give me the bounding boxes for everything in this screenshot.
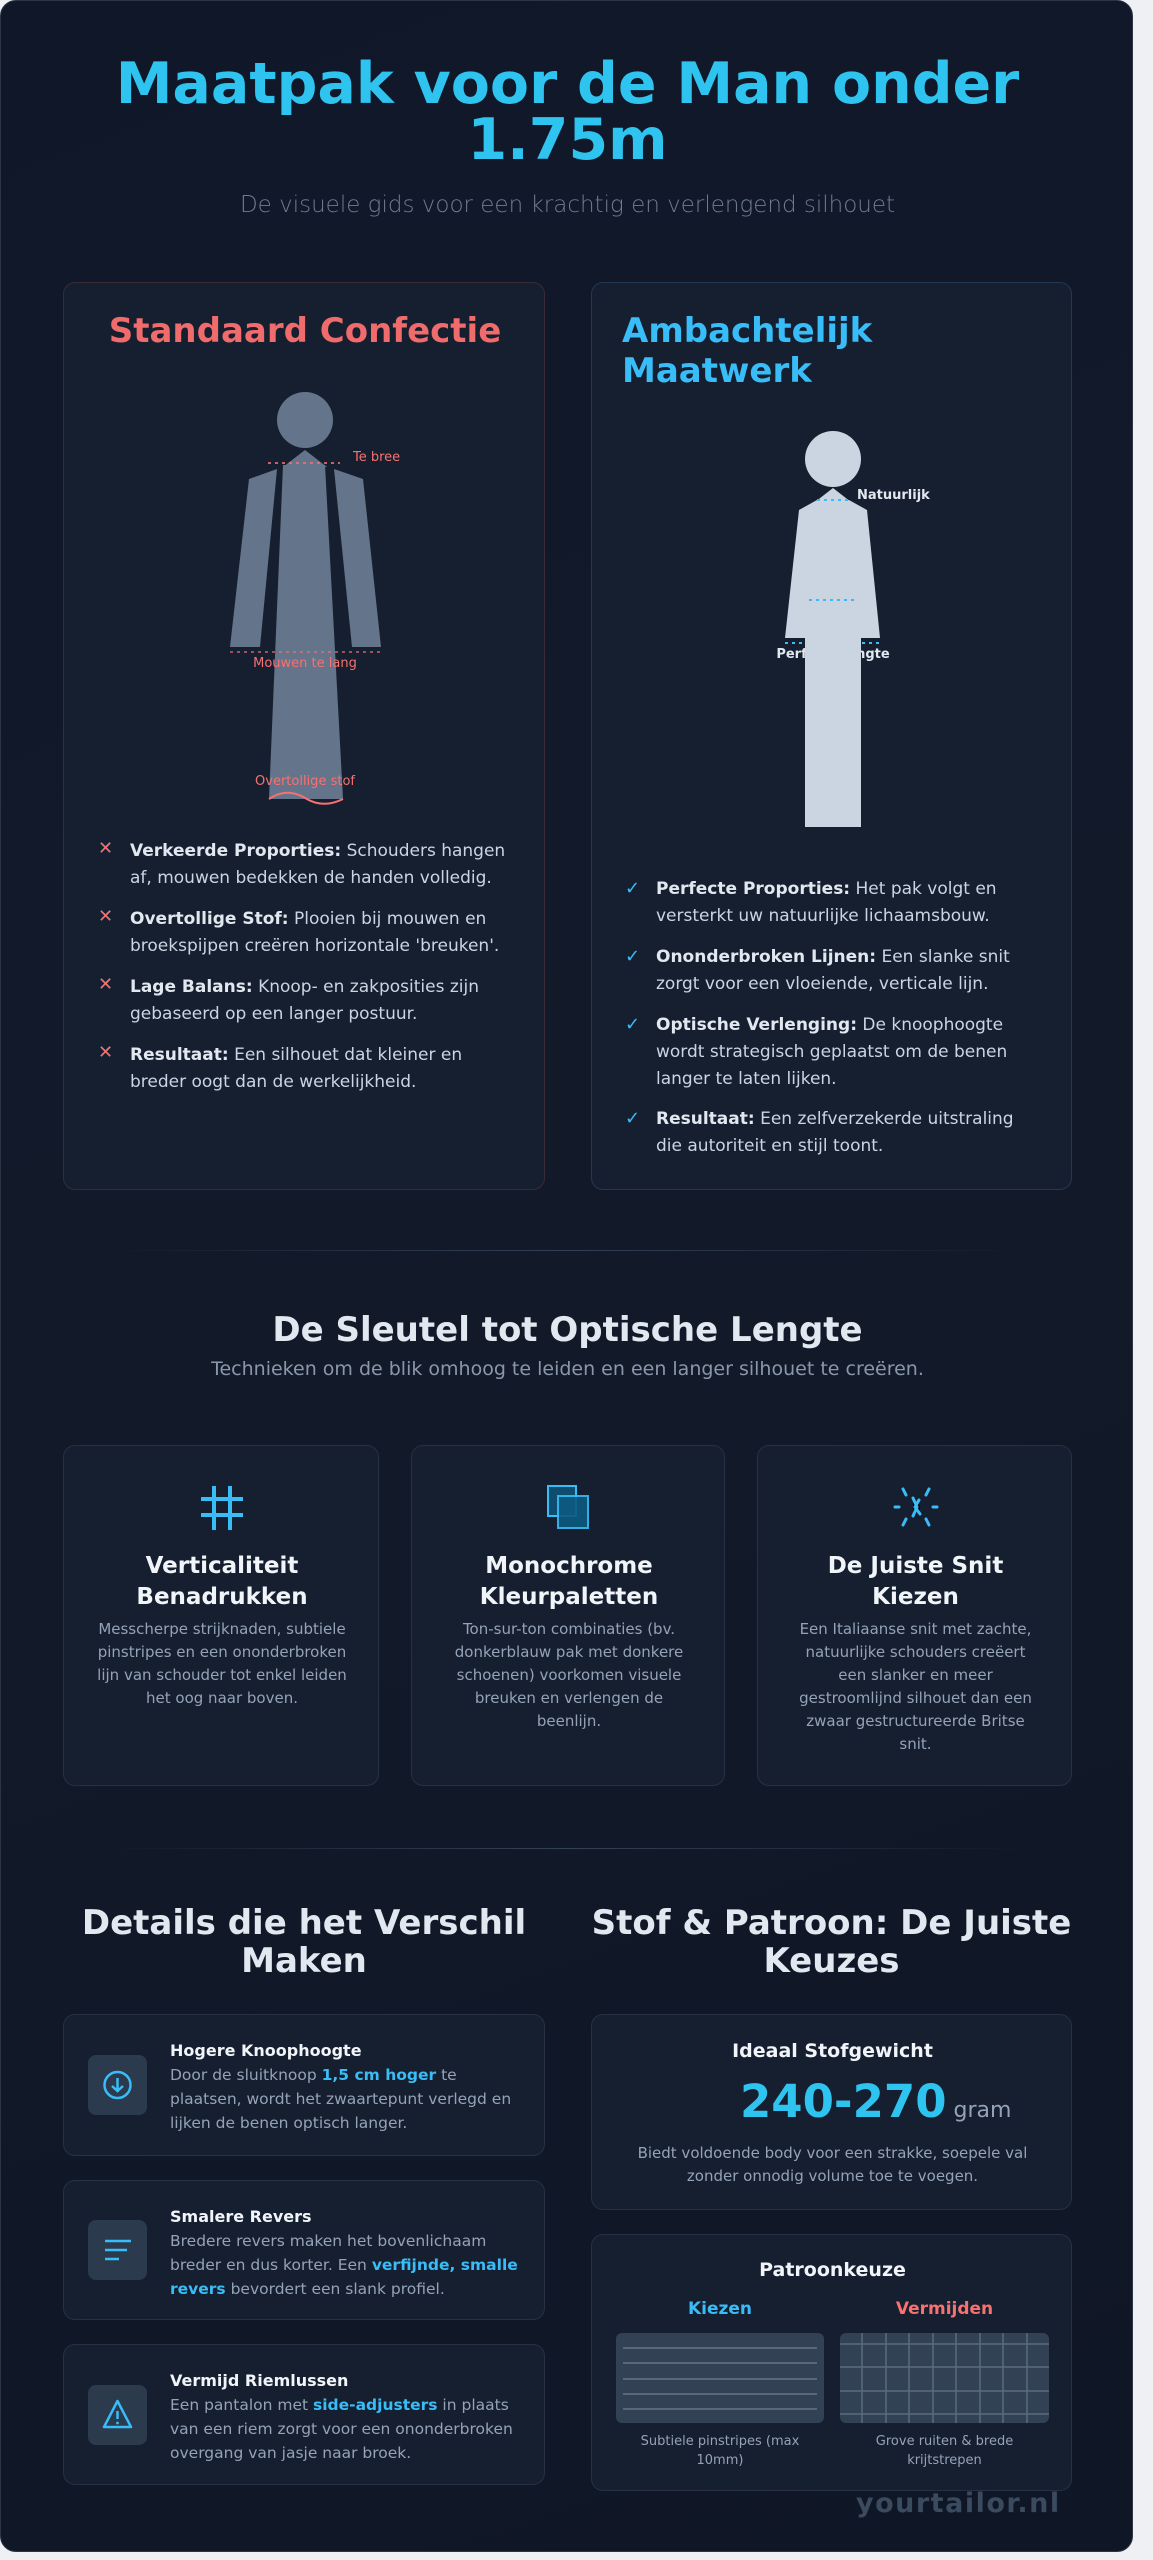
list: problems (98, 838, 505, 1092)
heading: sleutel tot optische lengte: De Sleutel tot Optische Lengte (272, 1310, 863, 1350)
vermijden column: Vermijden (896, 2299, 993, 2319)
title: Benadrukken (136, 1584, 308, 1610)
title: Verticaliteit (146, 1553, 298, 1579)
title: De Juiste Snit (828, 1553, 1003, 1579)
title (136, 1553, 308, 1610)
icon: sparkle (894, 1487, 938, 1527)
title (480, 1553, 658, 1610)
icon: hash (201, 1486, 243, 1530)
figure: tailored suit: Natuurlijk (857, 488, 930, 503)
subtitle: De visuele gids voor een krachtig en verlengend silhouet (240, 192, 895, 218)
list: benefits: Resultaat: Een zelfverzekerde uitstraling die autoriteit en stijl toont. (656, 1109, 1014, 1156)
panel: ambachtelijk maatwerk (591, 282, 1072, 1190)
subheading: Technieken om de blik omhoog te leiden en een langer silhouet te creëren. (211, 1358, 924, 1380)
swatch: checks (840, 2333, 1049, 2423)
heading: ambachtelijk maatwerk: Ambachtelijk (622, 311, 872, 351)
list: benefits: Optische Verlenging: De knoophoogte wordt strategisch geplaatst om de benen langer te laten lijken. (656, 1015, 1007, 1089)
body: Een Italiaanse snit met zachte, natuurlijke schouders creëert een slanker en meer gestroomlijnd silhouet dan een zwaar gestructureerde Britse snit. (799, 1620, 1032, 1753)
list: problems: Verkeerde Proporties: Schouders hangen af, mouwen bedekken de handen volledig. (130, 841, 505, 888)
title: Maatpak voor de Man onder (116, 51, 1019, 117)
list: benefits: Ononderbroken Lijnen: Een slanke snit zorgt voor een vloeiende, verticale lijn. (656, 947, 1010, 994)
stat: 240-270 gram (740, 2075, 1011, 2128)
panel: smalere revers (63, 2180, 545, 2320)
vermijden column: Grove ruiten & brede krijtstrepen (876, 2434, 1013, 2468)
figure: ill-fitting suit: Mouwen te lang (253, 656, 357, 671)
panel: monochrome (411, 1445, 725, 1786)
heading: standaard confectie: Standaard Confectie (109, 311, 501, 351)
text: Bredere revers maken het bovenlichaam breder en dus korter. Een verfijnde, smalle revers bevordert een slank profiel. (170, 2232, 518, 2298)
list: benefits: Perfecte Proporties: Het pak volgt en versterkt uw natuurlijke lichaamsbouw. (656, 879, 997, 926)
icon: warning (88, 2385, 147, 2445)
title: Ideaal Stofgewicht (732, 2040, 933, 2062)
panel: juiste snit (757, 1445, 1072, 1786)
body: Messcherpe strijknaden, subtiele pinstripes en een ononderbroken lijn van schouder tot enkel leiden het oog naar boven. (97, 1620, 347, 1707)
list: benefits: ✓ (625, 1108, 640, 1129)
text: Vermijd Riemlussen (170, 2371, 348, 2390)
text: Een pantalon met side-adjusters in plaats van een riem zorgt voor een ononderbroken overgang van jasje naar broek. (170, 2396, 513, 2462)
list: problems: ✕ (98, 838, 113, 859)
panel: standaard confectie (63, 282, 545, 1190)
text: Door de sluitknoop 1,5 cm hoger te plaatsen, wordt het zwaartepunt verlegd en lijken de benen optisch langer. (170, 2066, 511, 2132)
text: Hogere Knoophoogte (170, 2041, 362, 2060)
list: problems: Resultaat: Een silhouet dat kleiner en breder oogt dan de werkelijkheid. (130, 1045, 462, 1092)
kiezen column: Kiezen (688, 2299, 752, 2319)
list: benefits: ✓ (625, 878, 640, 899)
list: problems: ✕ (98, 1042, 113, 1063)
panel: patroonkeuze (591, 2234, 1072, 2491)
icon: arrow down circle (88, 2055, 147, 2115)
title: Monochrome (485, 1553, 653, 1579)
title: Kiezen (872, 1584, 959, 1610)
swatch: pinstripes (616, 2333, 824, 2423)
figure: tailored suit (776, 431, 930, 827)
vermijden column (840, 2299, 1049, 2468)
heading: stof & patroon: Stof & Patroon: De Juiste (592, 1903, 1071, 1943)
heading: details: Maken (241, 1941, 367, 1981)
heading: ambachtelijk maatwerk: Maatwerk (622, 351, 812, 391)
panel: hogere knoophoogte (63, 2014, 545, 2156)
figure: ill-fitting suit: Overtollige stof (255, 774, 355, 789)
heading: details: Details die het Verschil (82, 1903, 526, 1943)
title (828, 1553, 1003, 1610)
heading: stof & patroon (592, 1903, 1071, 1981)
title (116, 51, 1020, 173)
figure: ill-fitting suit (230, 392, 400, 805)
heading: details (82, 1903, 526, 1981)
list: problems: Overtollige Stof: Plooien bij mouwen en broekspijpen creëren horizontale 'breuken'. (130, 909, 499, 956)
watermark: yourtailor.nl (856, 2488, 1061, 2519)
panel: stofgewicht (591, 2014, 1072, 2210)
kiezen column (616, 2299, 824, 2468)
list: problems: Lage Balans: Knoop- en zakposities zijn gebaseerd op een langer postuur. (130, 977, 479, 1024)
list: problems: ✕ (98, 906, 113, 927)
list: benefits: ✓ (625, 946, 640, 967)
icon: squares (547, 1485, 589, 1529)
figure: tailored suit: Perfecte lengte (776, 647, 890, 662)
list: benefits (625, 878, 1014, 1156)
icon: lines (88, 2220, 147, 2280)
figure: ill-fitting suit: Te bree (352, 450, 400, 465)
title: Kleurpaletten (480, 1584, 658, 1610)
title: 1.75m (467, 107, 668, 173)
list: problems: ✕ (98, 974, 113, 995)
panel: verticaliteit (63, 1445, 379, 1786)
heading: ambachtelijk maatwerk (622, 311, 873, 391)
kiezen column: Subtiele pinstripes (max 10mm) (641, 2434, 799, 2468)
body: Biedt voldoende body voor een strakke, soepele val zonder onnodig volume toe te voegen. (638, 2144, 1027, 2185)
text: Smalere Revers (170, 2207, 312, 2226)
panel: vermijd riemlussen (63, 2344, 545, 2485)
list: benefits: ✓ (625, 1014, 640, 1035)
heading: stof & patroon: Keuzes (763, 1941, 900, 1981)
body: Ton-sur-ton combinaties (bv. donkerblauw pak met donkere schoenen) voorkomen visuele breuken en verlengen de beenlijn. (455, 1620, 683, 1730)
title: Patroonkeuze (759, 2259, 906, 2281)
